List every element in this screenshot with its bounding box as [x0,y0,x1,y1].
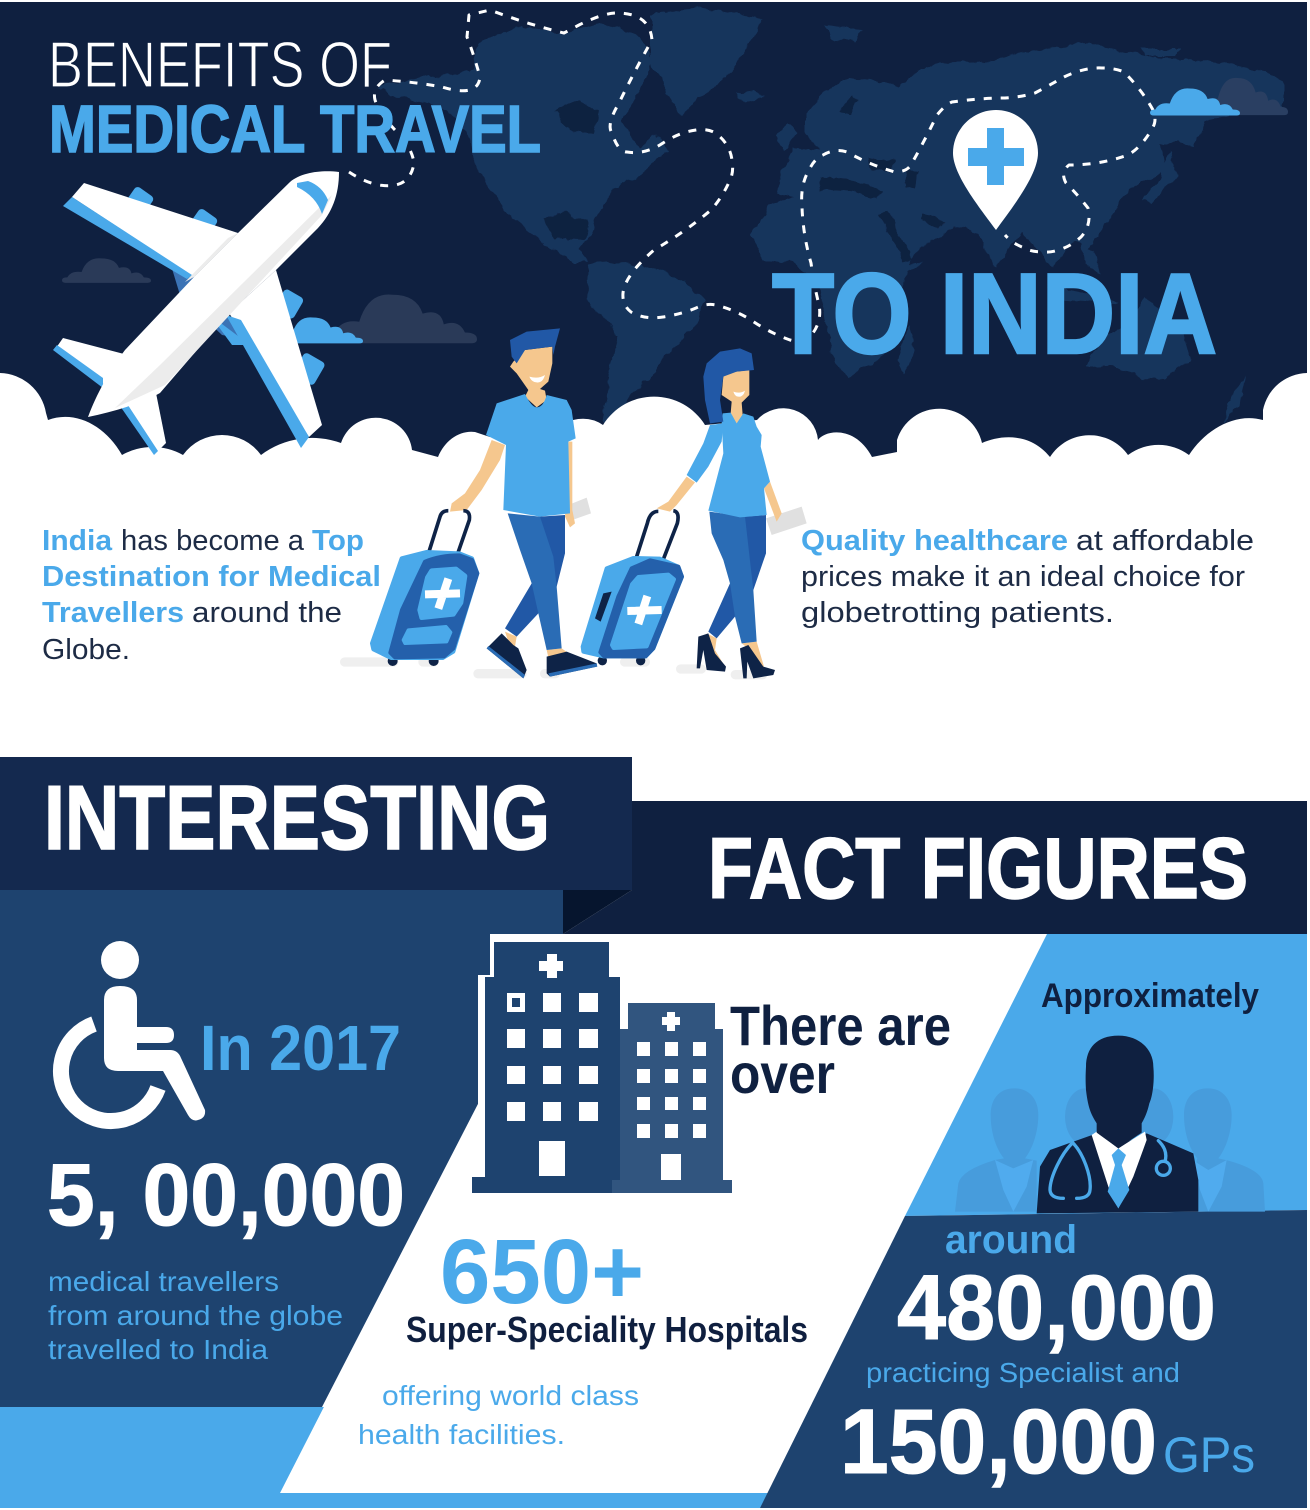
panel: doctors light blue [905,934,1307,1216]
text: there are over: over [730,1042,835,1105]
banner fold [563,890,632,934]
cockpit window [297,181,328,214]
text block: medical travellers [48,1266,343,1365]
text block: quality healthcare: Quality healthcare [801,525,1068,557]
text: practicing specialist: practicing Specialist and [866,1357,1180,1388]
text block: quality healthcare [801,525,1254,629]
fuselage [88,171,339,417]
text block: medical travellers: travelled to India [48,1334,268,1365]
man [450,328,597,678]
world map [378,8,1284,424]
panel: left stat background [0,890,563,1407]
text block: India top destination: Travellers [42,597,184,629]
text block: India top destination: has become a [121,525,305,557]
stat: 150,000: 150,000 [840,1391,1157,1493]
map: North America [378,22,668,262]
title: benefits of medical travel: MEDICAL TRAVEL [49,92,541,167]
text: there are over: There are [730,994,951,1057]
text: GPs: GPs [1163,1427,1255,1483]
text block: India top destination: Top [312,525,364,557]
title: benefits of medical travel: BENEFITS OF [48,28,392,101]
text block: India top destination: around the [192,597,342,629]
woman [657,348,807,678]
text block: medical travellers: from around the globe [48,1300,343,1331]
stat: in 2017: In 2017 [200,1012,401,1084]
text block: India top destination: India [42,525,113,557]
text block: world class facilities: health facilities. [358,1419,565,1450]
figures: travellers with luggage [340,328,807,679]
text block: India top destination [42,525,381,666]
stat: 5,00,000: 5, 00,000 [47,1145,405,1244]
ghost doctors [955,1088,1265,1212]
text block: medical travellers: medical travellers [48,1266,279,1297]
title: benefits of medical travel [48,28,541,167]
banner: fact figures [563,801,1307,934]
main doctor [1037,1036,1198,1213]
icon: airplane [53,171,339,455]
stat: 650+: 650+ [440,1221,644,1323]
panel: hero background [0,2,1307,472]
text: there are over [730,994,951,1105]
panel: hospitals white background [280,934,1047,1493]
cloud: blue right [1150,88,1240,116]
icon: large hospital [472,942,631,1193]
text block: India top destination: Globe. [42,634,130,666]
engines [125,185,326,386]
map: South America [587,262,705,424]
map: inland seas [819,96,946,262]
map: Greenland [650,8,764,116]
wing top [72,183,238,277]
tail bottom [120,383,166,455]
cloud: dark right [1198,78,1288,115]
text: super-speciality hospitals: Super-Speciality Hospitals [406,1309,808,1350]
luggage: left [372,511,477,666]
icon: wheelchair [61,941,205,1121]
heading: interesting: INTERESTING [44,768,550,869]
text block: quality healthcare: globetrotting patients. [801,597,1114,629]
map: islands [735,25,1246,422]
panel: bottom light blue strip [0,1407,770,1508]
ghost doctor shirts [995,1160,1227,1212]
text: approximately: Approximately [1041,977,1259,1015]
icon: small hospital [612,1003,732,1193]
map: Australia [1085,296,1190,378]
clouds: white cloud bank [0,373,1307,757]
title: to india: TO INDIA [772,251,1217,378]
cloud: blue middle [273,317,363,343]
ground shadows [340,657,767,679]
fuselage shadow [115,195,332,408]
wing bottom [229,270,322,437]
text block: India top destination: Destination for Medical [42,561,381,593]
icon: location pin with cross [953,110,1038,230]
text block: world class facilities [358,1380,639,1450]
map: Hudson Bay and Gulf [543,100,598,240]
text: around: around [945,1218,1077,1262]
text block: world class facilities: offering world class [382,1380,639,1411]
panel: specialist stats dark blue [760,1210,1307,1508]
text block: quality healthcare: at affordable [1076,525,1254,557]
cloud: dark middle [326,294,477,343]
inner wing shadow [170,262,250,340]
text block: quality healthcare: prices make it an ideal choice for [801,561,1245,593]
stat: 480,000: 480,000 [897,1257,1216,1359]
banner: interesting [0,757,632,890]
cloud: dark left [62,258,151,283]
icon: doctors [955,1036,1265,1213]
tail top [56,338,124,386]
map: Africa and Eurasia [751,43,1284,377]
dashed travel route [349,10,1155,341]
luggage: right [583,511,682,665]
